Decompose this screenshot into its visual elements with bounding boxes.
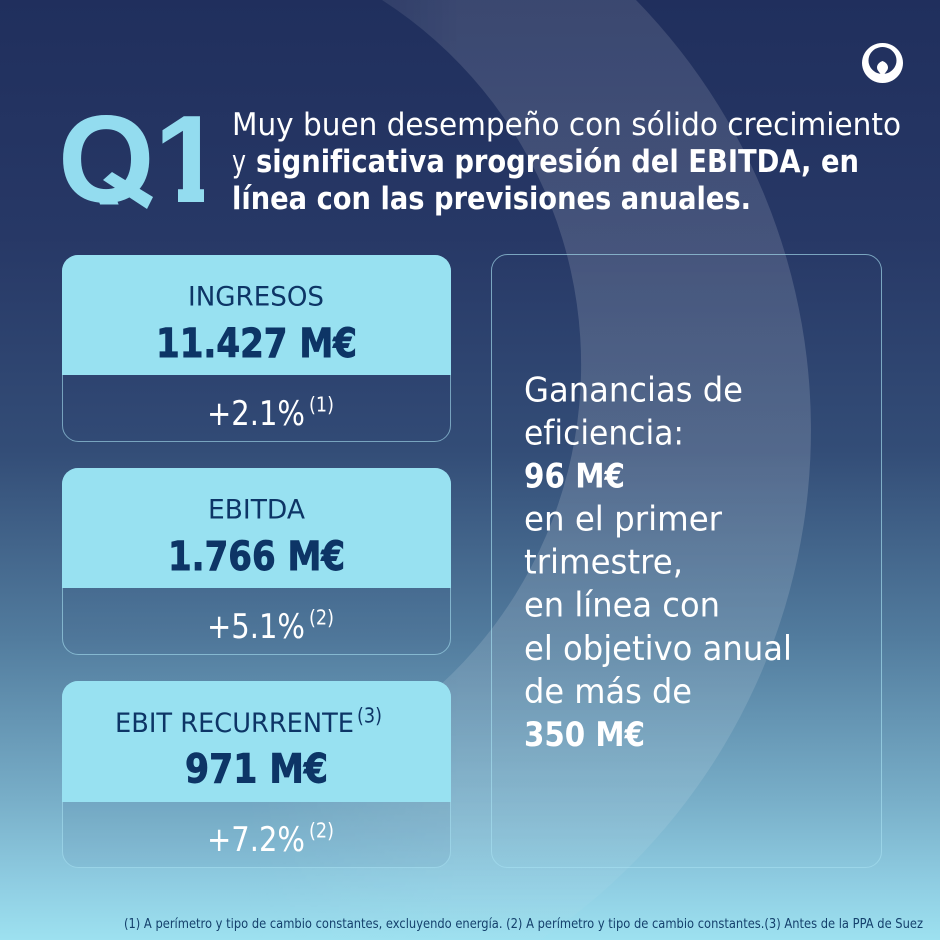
efficiency text: 96 M€ <box>524 456 625 496</box>
panel: ingresos <box>62 255 451 442</box>
label: ebit recurrente: (3) <box>357 704 382 728</box>
title: Q1: Q <box>58 91 154 229</box>
change: ebit recurrente: (2) <box>309 818 334 842</box>
efficiency text: en línea con <box>524 586 720 624</box>
change: ebitda: (2) <box>309 606 334 630</box>
value: ingresos: 11.427 M€ <box>156 321 357 367</box>
title: Q1 <box>63 115 204 209</box>
change: ebit recurrente: +7.2% <box>207 820 305 860</box>
efficiency text: eficiencia: <box>524 414 684 452</box>
efficiency text: 350 M€ <box>524 715 645 754</box>
efficiency text: trimestre, <box>524 542 683 582</box>
panel: ebit recurrente <box>62 681 451 868</box>
heading text: significativa progresión del EBITDA, en <box>256 144 859 180</box>
heading text: Muy buen desempeño con sólido crecimiento <box>232 107 901 143</box>
change: ingresos: +2.1% <box>207 394 305 434</box>
panel: efficiency gains <box>492 254 882 868</box>
efficiency text: Ganancias de <box>524 370 743 410</box>
heading text: línea con las previsiones anuales. <box>232 181 751 217</box>
efficiency text: el objetivo anual <box>524 629 792 668</box>
efficiency text: de más de <box>524 672 692 711</box>
icon: logo <box>862 43 903 83</box>
value: ebitda: 1.766 M€ <box>168 534 345 580</box>
label: ebitda: EBITDA <box>208 494 306 526</box>
change: ingresos: (1) <box>309 392 334 416</box>
background crescent <box>376 0 811 854</box>
efficiency text <box>524 370 792 754</box>
change: ebitda: +5.1% <box>207 607 305 647</box>
label: ingresos: INGRESOS <box>188 282 324 312</box>
panel: ebitda <box>62 468 451 654</box>
efficiency text: en el primer <box>524 500 722 538</box>
title: Q1: 1 <box>154 91 223 229</box>
heading text <box>232 107 901 217</box>
value: ebit recurrente: 971 M€ <box>185 746 328 792</box>
heading text: y <box>232 144 246 180</box>
label: ebit recurrente: EBIT RECURRENTE <box>115 708 354 739</box>
